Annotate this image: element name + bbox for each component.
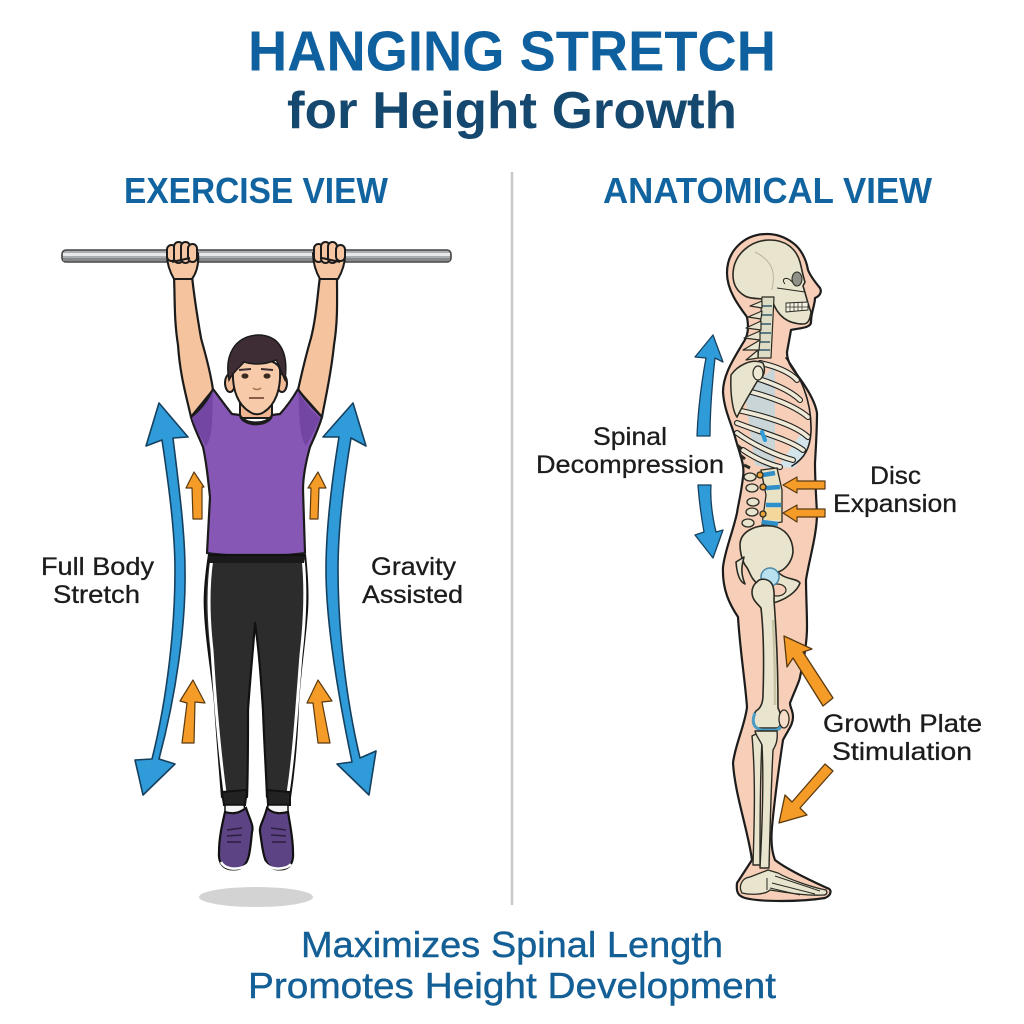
pelvis	[736, 526, 800, 603]
label: full body stretch	[41, 553, 155, 609]
label: gravity assisted: Gravity	[371, 553, 457, 581]
arrow: orange lower left	[180, 680, 205, 743]
rib cage	[737, 358, 811, 470]
figure: left shoe	[219, 805, 253, 869]
arrow: orange upper left	[186, 472, 204, 519]
label: disc expansion: Disc	[870, 462, 921, 490]
heading: exercise view: EXERCISE VIEW	[124, 170, 388, 211]
tibia and fibula	[752, 731, 777, 868]
arrow: orange upper right	[308, 472, 326, 519]
label: growth plate stimulation: Stimulation	[832, 738, 972, 766]
figure: head	[225, 335, 287, 414]
figure: right hand	[313, 242, 345, 279]
label: full body stretch: Full Body	[41, 553, 155, 581]
arrow: spinal decompression down	[695, 485, 723, 558]
scapula	[731, 361, 764, 417]
body silhouette	[723, 234, 831, 901]
label: spinal decompression	[536, 423, 724, 479]
label: spinal decompression: Decompression	[536, 451, 724, 479]
footer text	[248, 924, 776, 1006]
heading: anatomical view: ANATOMICAL VIEW	[603, 170, 932, 211]
panel: exercise view figure	[41, 242, 463, 907]
skull	[733, 240, 811, 324]
panel: anatomical view figure	[536, 234, 982, 901]
foot bones	[740, 870, 827, 895]
label: disc expansion	[833, 462, 957, 518]
figure: left arm	[174, 276, 213, 417]
cervical spine	[743, 297, 774, 360]
footer text: Promotes Height Development	[248, 965, 776, 1006]
arrow: disc expansion upper	[783, 477, 825, 493]
label: spinal decompression: Spinal	[593, 423, 667, 451]
figure: neck	[240, 395, 272, 418]
label: full body stretch: Stretch	[53, 581, 140, 609]
title: for Height Growth	[287, 82, 737, 140]
figure: hair	[228, 335, 286, 380]
hip joint	[761, 568, 779, 586]
patella	[779, 710, 789, 728]
arrow: spinal decompression up	[695, 335, 723, 436]
figure: left hand	[167, 242, 198, 279]
label: growth plate stimulation	[823, 710, 982, 766]
label: growth plate stimulation: Growth Plate	[823, 710, 982, 738]
label: gravity assisted	[362, 553, 463, 609]
figure: right arm	[298, 276, 337, 417]
arrow: right gravity assisted	[323, 403, 376, 795]
figure: right shoe	[260, 805, 293, 869]
title: HANGING STRETCH	[248, 20, 776, 84]
label: gravity assisted: Assisted	[362, 581, 463, 609]
arrow: left full-body stretch	[135, 403, 188, 795]
floor shadow	[199, 887, 313, 907]
arrow: orange lower right	[307, 680, 332, 743]
label: disc expansion: Expansion	[833, 490, 957, 518]
figure: shirt	[191, 389, 322, 556]
arrow: growth plate lower	[779, 764, 833, 823]
femur	[752, 579, 781, 728]
pull-up bar	[62, 250, 451, 262]
lumbar spine	[737, 445, 782, 527]
arrow: disc expansion lower	[783, 505, 825, 522]
title	[248, 20, 776, 140]
footer text: Maximizes Spinal Length	[301, 924, 723, 965]
arrow: growth plate upper	[784, 636, 833, 706]
figure: pants	[205, 555, 307, 805]
knee cartilage	[753, 713, 781, 730]
